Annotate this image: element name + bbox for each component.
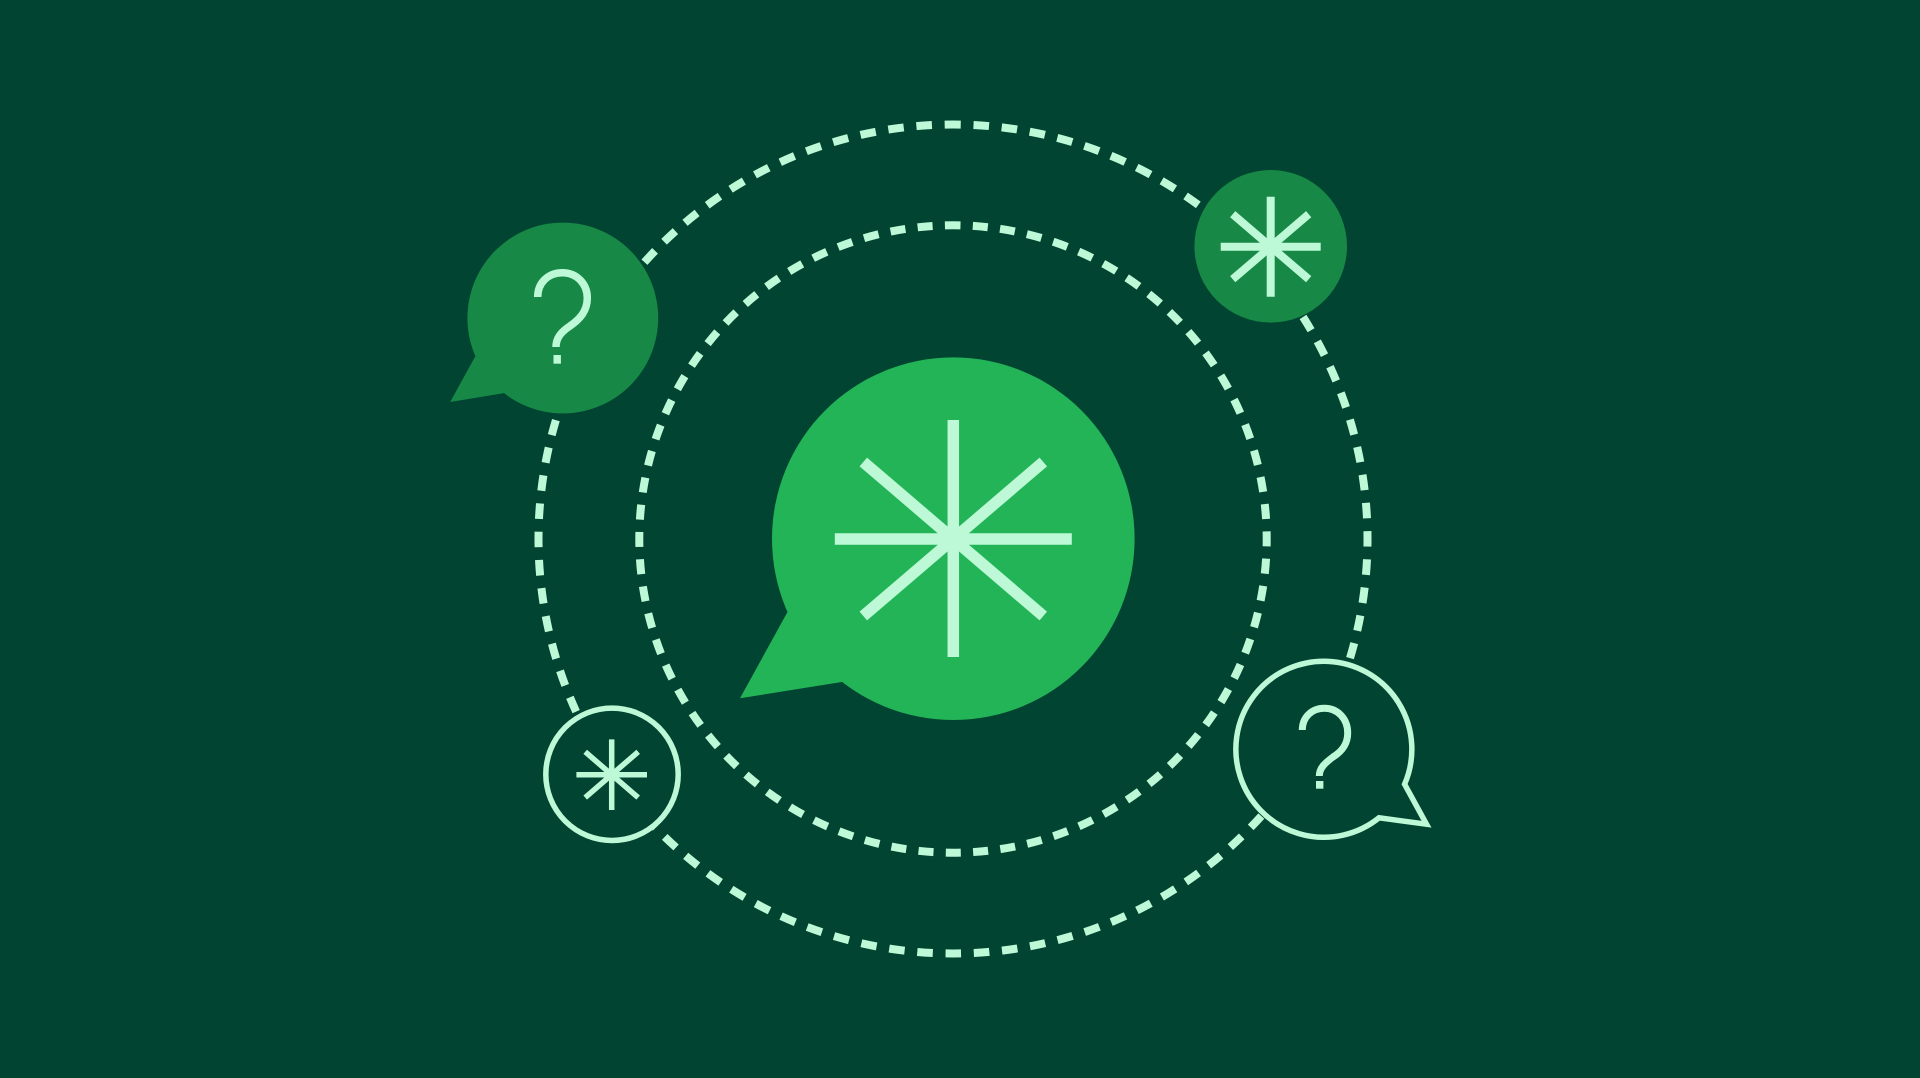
top-right filled asterisk circle [1194, 170, 1347, 323]
asterisk icon [1221, 197, 1321, 297]
filled circle [1194, 170, 1347, 323]
asterisk icon [576, 739, 647, 810]
bottom-left outlined asterisk circle [546, 708, 678, 840]
filled bubble shape [450, 223, 658, 413]
central speech bubble with asterisk [740, 357, 1135, 720]
outer dashed orbit ring [538, 124, 1368, 954]
central asterisk icon [835, 420, 1072, 657]
question mark icon [1302, 708, 1348, 789]
question mark icon [538, 273, 587, 364]
top-left filled question bubble [450, 223, 658, 413]
outlined bubble shape [1236, 661, 1426, 837]
inner dashed orbit ring [639, 225, 1267, 853]
bottom-right outlined question bubble [1236, 661, 1426, 837]
outlined circle [546, 708, 678, 840]
central bubble shape [740, 357, 1135, 720]
